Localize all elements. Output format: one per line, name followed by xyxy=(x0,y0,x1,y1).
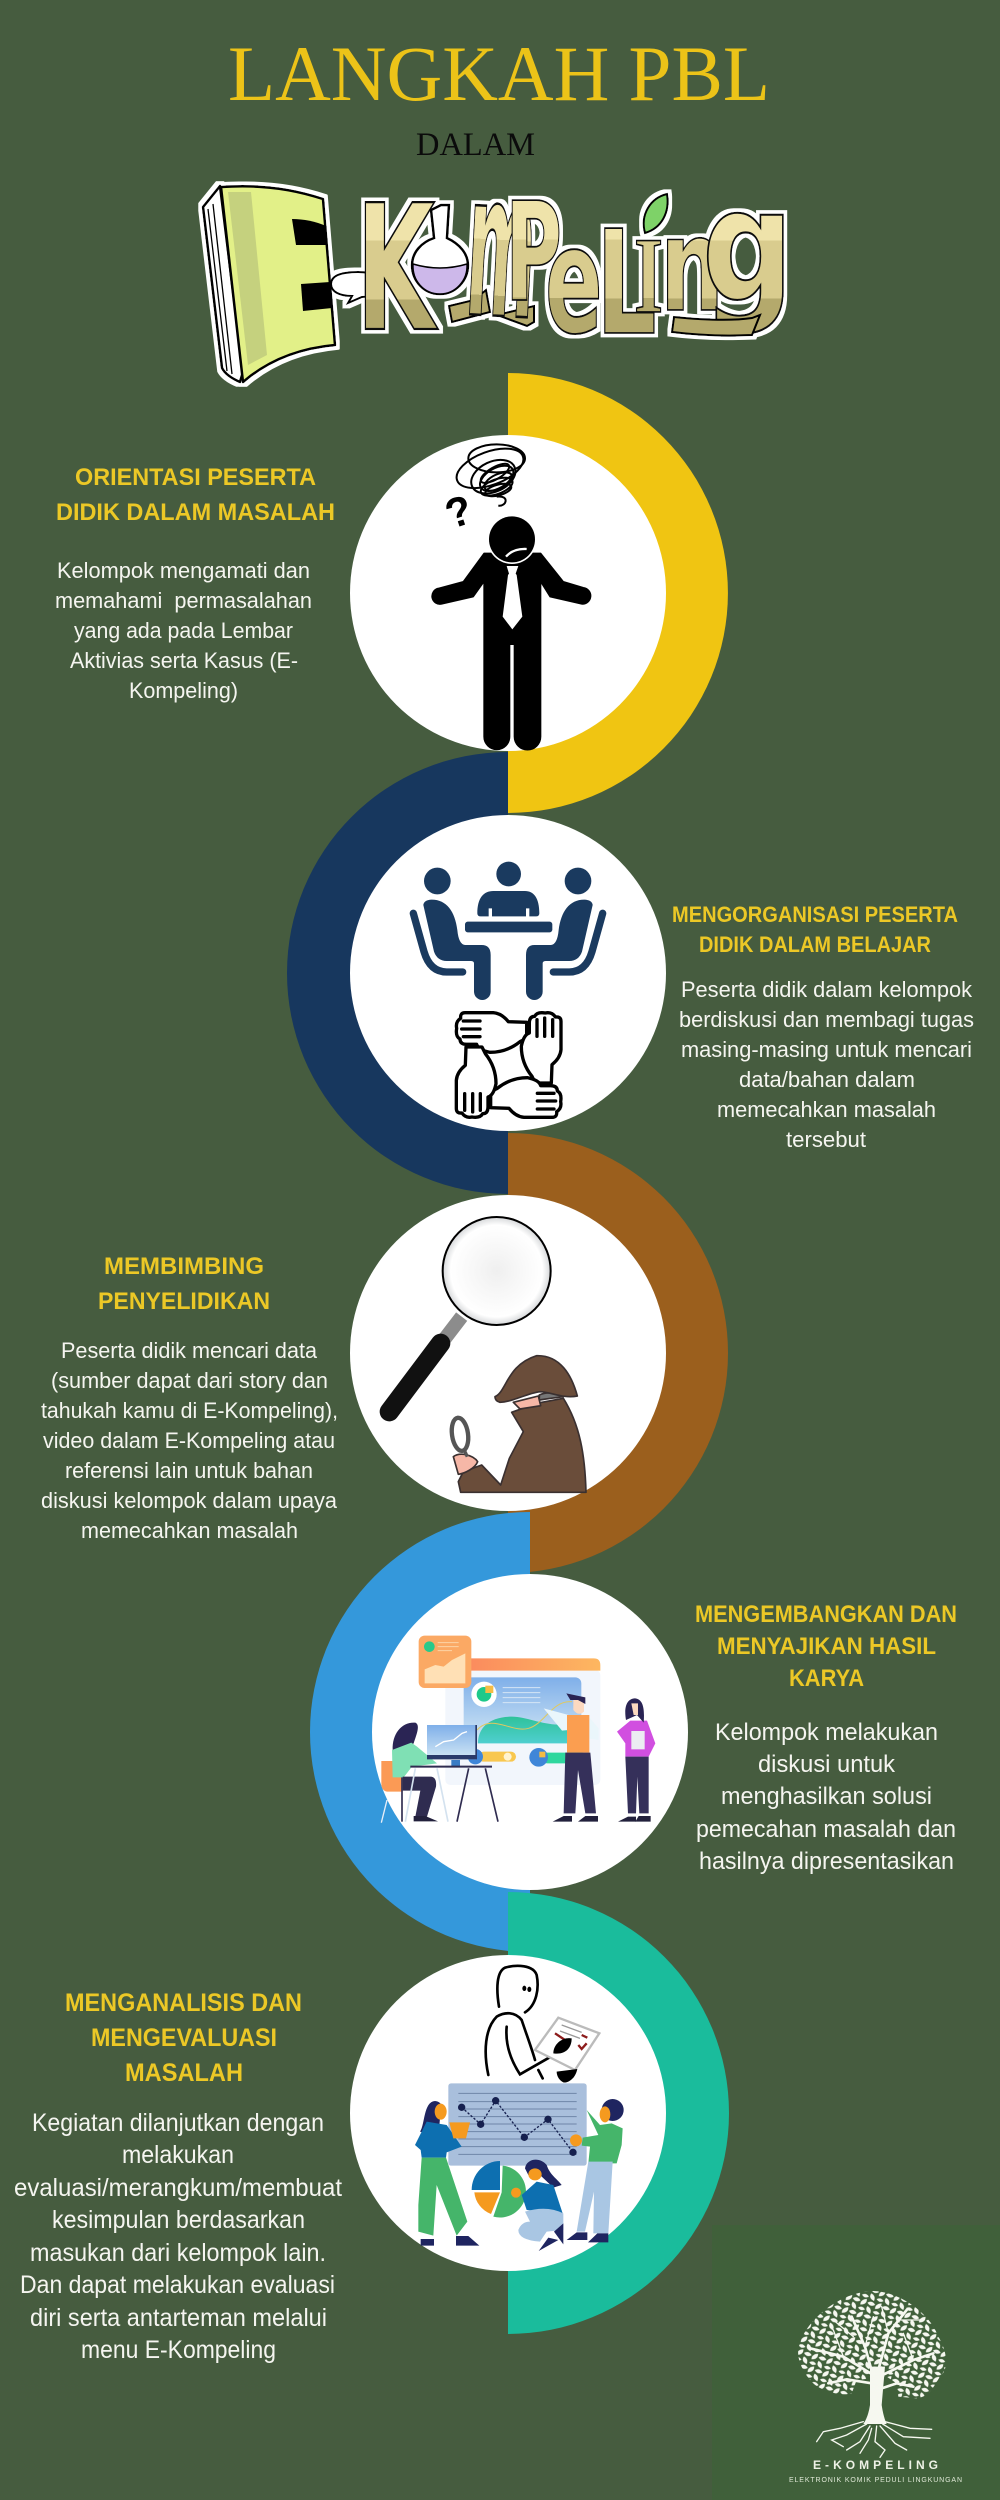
white circle xyxy=(350,1195,666,1511)
icon: tree xyxy=(798,2291,946,2457)
heading: PENYELIDIKAN xyxy=(98,1288,270,1315)
detective xyxy=(450,1356,586,1492)
subtitle: DALAM xyxy=(416,127,535,163)
illustration: presentation xyxy=(381,1636,655,1823)
logo letters: K xyxy=(356,168,438,370)
heading: MEMBIMBING xyxy=(104,1253,264,1280)
chart board xyxy=(448,2083,587,2166)
description: memahami permasalahan xyxy=(55,588,312,613)
step 3: membimbing xyxy=(41,1133,728,1573)
logo letters: L xyxy=(596,200,657,367)
chips xyxy=(479,1752,516,1762)
heading: MENGORGANISASI PESERTA xyxy=(672,902,958,927)
icon: book forming the letter E xyxy=(203,186,335,382)
logo letters: P xyxy=(505,175,562,333)
teal half ring xyxy=(508,1892,729,2334)
logo letters: m xyxy=(461,130,542,366)
blue half ring xyxy=(310,1512,530,1952)
description: yang ada pada Lembar xyxy=(74,618,293,643)
heading xyxy=(672,902,958,957)
description: Dan dapat melakukan evaluasi xyxy=(20,2271,335,2299)
description: kesimpulan berdasarkan xyxy=(52,2206,305,2234)
description: menu E-Kompeling xyxy=(81,2336,276,2364)
heading: MENGANALISIS DAN xyxy=(65,1989,302,2017)
heading: MENYAJIKAN HASIL xyxy=(717,1633,936,1660)
description xyxy=(14,2109,342,2364)
logo letters: n xyxy=(660,192,724,341)
description xyxy=(55,558,312,703)
icon: speech bubble hyphen xyxy=(331,272,384,303)
heading: MENGEMBANGKAN DAN xyxy=(695,1601,957,1628)
white circle xyxy=(350,1955,666,2271)
heading xyxy=(56,464,335,526)
description: Aktivias serta Kasus (E- xyxy=(70,648,298,673)
description: referensi lain untuk bahan xyxy=(65,1458,313,1483)
icon: confused man xyxy=(432,441,591,750)
logo letters: I xyxy=(634,216,663,336)
description: video dalam E-Kompeling atau xyxy=(43,1428,335,1453)
four linked hands xyxy=(456,1013,561,1117)
description: pemecahan masalah dan xyxy=(696,1816,956,1843)
description: masukan dari kelompok lain. xyxy=(30,2239,326,2267)
magnifier xyxy=(389,1217,551,1412)
white circle xyxy=(350,815,666,1131)
description: berdiskusi dan membagi tugas xyxy=(679,1007,974,1032)
description: Kegiatan dilanjutkan dengan xyxy=(32,2109,324,2137)
thinking figure xyxy=(486,1966,557,2078)
heading xyxy=(98,1253,270,1315)
description: diskusi untuk xyxy=(758,1751,896,1778)
step 4: mengembangkan xyxy=(310,1512,957,1952)
card xyxy=(419,1636,471,1688)
brand name: E-KOMPELING xyxy=(813,2458,938,2472)
navy half ring xyxy=(287,752,508,1194)
step 1: orientasi xyxy=(55,373,728,813)
heading: DIDIK DALAM BELAJAR xyxy=(699,932,931,957)
description: data/bahan dalam xyxy=(739,1067,915,1092)
heading: MENGEVALUASI xyxy=(91,2024,277,2052)
description: Kelompok melakukan xyxy=(715,1719,938,1746)
description: memecahkan masalah xyxy=(81,1518,298,1543)
description: diri serta antarteman melalui xyxy=(30,2304,327,2332)
description xyxy=(679,977,974,1152)
description: tersebut xyxy=(786,1127,866,1152)
description: hasilnya dipresentasikan xyxy=(699,1848,954,1875)
right man xyxy=(602,2099,624,2121)
description xyxy=(41,1338,338,1543)
seated woman and desk xyxy=(381,1761,403,1792)
description: Kompeling) xyxy=(129,678,238,703)
description: Peserta didik dalam kelompok xyxy=(681,977,973,1002)
logo corner panel xyxy=(712,2225,1000,2500)
step 5: menganalisis xyxy=(14,1892,729,2364)
description: diskusi kelompok dalam upaya xyxy=(41,1488,338,1513)
logo letters: e xyxy=(545,196,603,368)
logo: tree with roots xyxy=(789,2291,962,2484)
icon: flask xyxy=(412,205,468,294)
heading: DIDIK DALAM MASALAH xyxy=(56,499,335,526)
question mark: ? xyxy=(439,485,478,538)
people at table xyxy=(423,862,593,1000)
heading: KARYA xyxy=(789,1665,864,1692)
description: masing-masing untuk mencari xyxy=(681,1037,972,1062)
figure xyxy=(432,553,591,750)
heading: ORIENTASI PESERTA xyxy=(75,464,316,491)
icon: magnifier and detective xyxy=(389,1217,586,1492)
logo: E-Kompeling xyxy=(203,130,794,382)
heading: MASALAH xyxy=(125,2059,243,2087)
icon: leaf xyxy=(644,194,668,233)
description: Peserta didik mencari data xyxy=(61,1338,318,1363)
description: evaluasi/merangkum/membuat xyxy=(14,2174,342,2202)
pie chart xyxy=(472,2161,500,2190)
description: Kelompok mengamati dan xyxy=(57,558,310,583)
white circle xyxy=(350,435,666,751)
description: menghasilkan solusi xyxy=(721,1783,932,1810)
tagline: ELEKTRONIK KOMIK PEDULI LINGKUNGAN xyxy=(789,2477,962,2484)
heading xyxy=(65,1989,302,2087)
left woman xyxy=(420,2101,443,2137)
presenter xyxy=(544,1708,569,1731)
brown half ring xyxy=(508,1133,728,1573)
yellow half ring xyxy=(508,373,728,813)
logo letters xyxy=(356,130,794,370)
scribble xyxy=(451,441,529,506)
description xyxy=(696,1719,956,1875)
white circle xyxy=(372,1574,688,1890)
description: (sumber dapat dari story dan xyxy=(51,1368,328,1393)
description: tahukah kamu di E-Kompeling), xyxy=(41,1398,338,1423)
standing woman xyxy=(617,1721,655,1757)
crouching woman xyxy=(525,2160,562,2188)
icon: meeting and hands xyxy=(413,862,603,1117)
title: LANGKAH PBL xyxy=(228,30,770,117)
description: memecahkan masalah xyxy=(717,1097,936,1122)
illustration: evaluation team xyxy=(415,1966,624,2251)
step 2: mengorganisasi xyxy=(287,752,974,1194)
logo letters: g xyxy=(702,156,794,337)
description: melakukan xyxy=(122,2141,234,2169)
heading xyxy=(695,1601,957,1692)
